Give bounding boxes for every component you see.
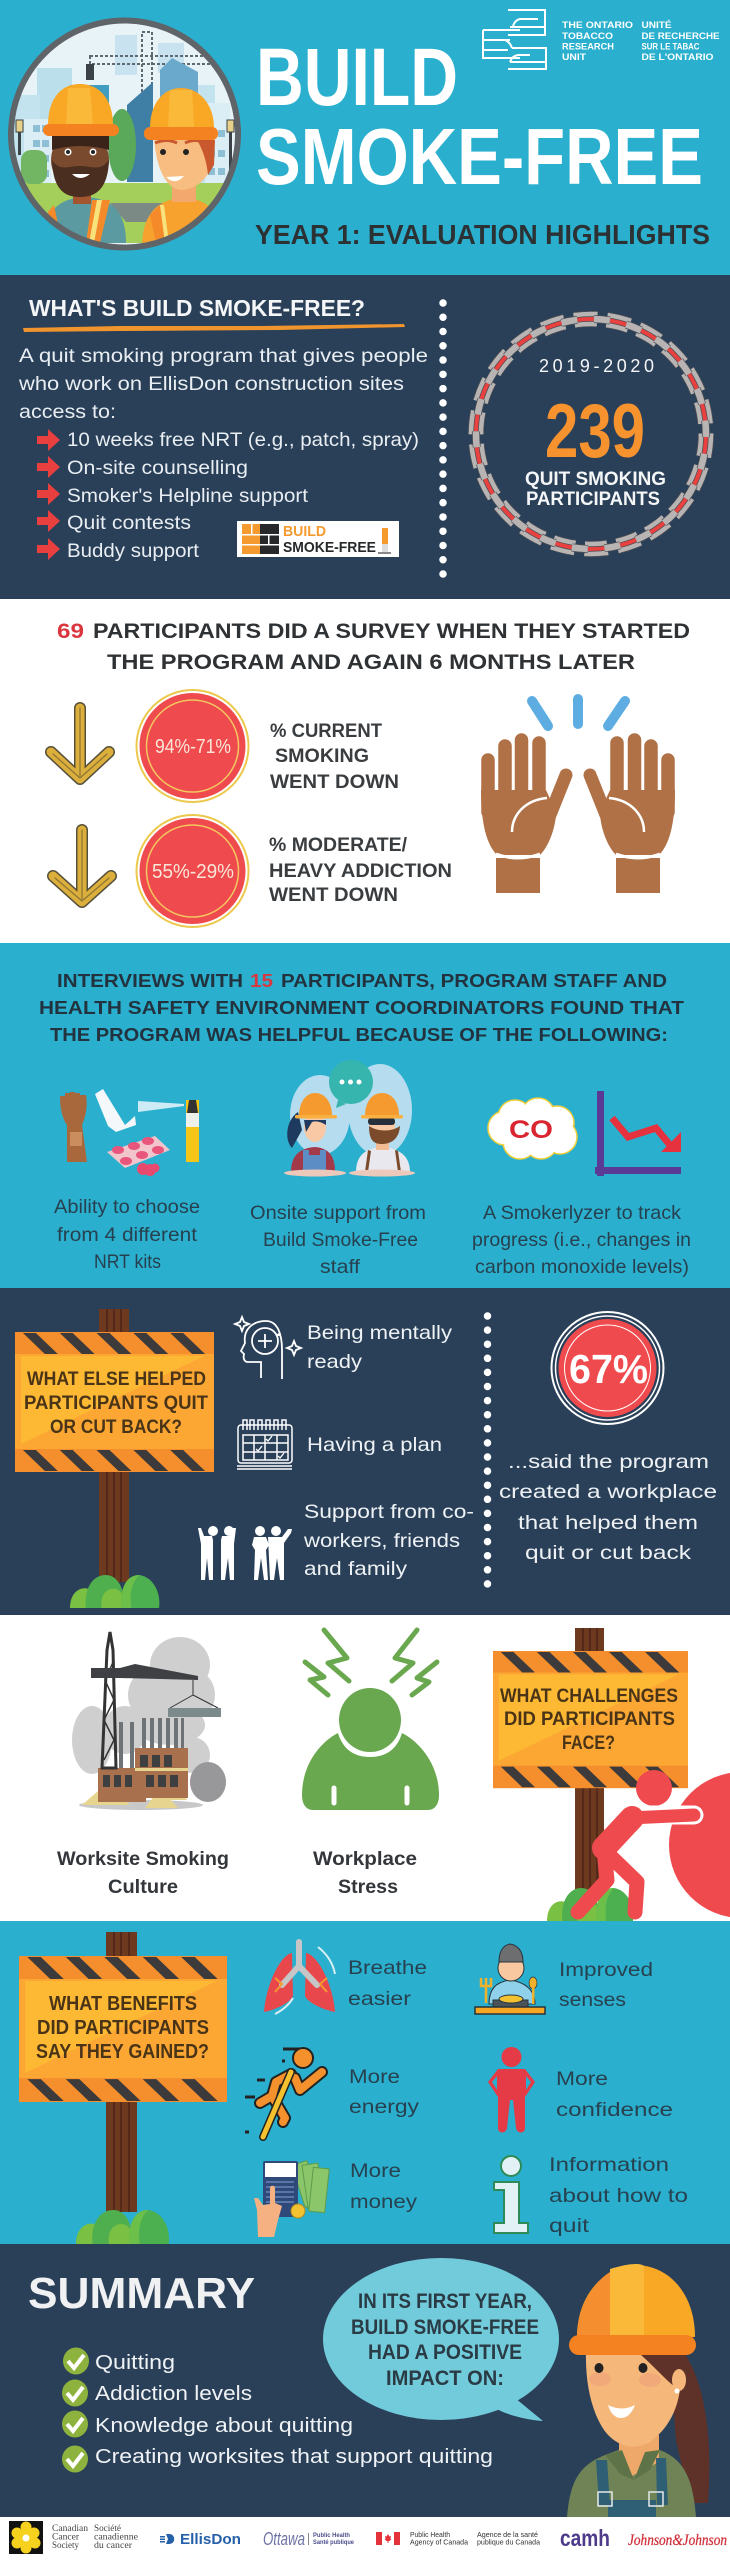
logo: Canadian Cancer Society: Canadian [52, 2524, 88, 2534]
text: improved senses: senses [559, 1989, 626, 2011]
sign: what benefits: DID PARTICIPANTS [37, 2017, 209, 2039]
logo: Ontario Tobacco Research Unit: UNITÉ [642, 20, 672, 31]
icon: CO cloud [488, 1098, 577, 1159]
text: said the program: created a workplace [499, 1481, 717, 1503]
logo: camh: camh [560, 2525, 610, 2551]
text: improved senses: Improved [559, 1959, 653, 1981]
caption: NRT kits [54, 1196, 200, 1273]
chain ring with participants count: 239 [545, 389, 645, 474]
chain ring with participants count: 2019-2020 [539, 356, 654, 376]
logo: Public Health Agency of Canada: Agency of Canada [410, 2538, 469, 2546]
text: being mentally ready: ready [307, 1351, 362, 1373]
caption: onsite support: Build Smoke-Free [263, 1229, 418, 1251]
speech bubble [323, 2258, 559, 2421]
caption: Smokerlyzer [472, 1202, 691, 1278]
dotted divider [484, 1316, 491, 1598]
label: addiction went down [269, 835, 452, 906]
illustration: female worker [567, 2264, 709, 2517]
icon: information [494, 2156, 528, 2233]
text: more money: money [350, 2191, 417, 2213]
heading: PARTICIPANTS DID A SURVEY WHEN THEY STARTED [93, 620, 690, 643]
caption: Smokerlyzer: carbon monoxide levels) [475, 1256, 689, 1278]
label: current smoking went down: WENT DOWN [270, 772, 399, 793]
text: breathe easier: Breathe [348, 1957, 427, 1979]
logo: Build Smoke-Free: SMOKE-FREE [283, 539, 376, 556]
logo: Ottawa Public Health: Santé publique [313, 2539, 354, 2546]
stat: moderate/heavy addiction [136, 815, 248, 927]
speech bubble: IN ITS FIRST YEAR, [358, 2290, 532, 2313]
panel: interviews [0, 943, 730, 1288]
bullet list: On-site counselling [67, 457, 248, 479]
heading: PARTICIPANTS, PROGRAM STAFF AND [281, 970, 667, 991]
chain ring with participants count: QUIT SMOKING [525, 469, 666, 490]
heading: SUMMARY [28, 2269, 255, 2318]
label: current smoking went down: SMOKING [275, 746, 369, 767]
text: more confidence [556, 2068, 673, 2121]
description: who work on EllisDon construction sites [18, 373, 404, 395]
bullet list [37, 429, 419, 562]
logo: Ontario Tobacco Research Unit: RESEARCH [562, 42, 614, 52]
text: said the program: that helped them [518, 1512, 698, 1534]
logo: Canadian Cancer Society: canadienne [94, 2532, 138, 2542]
icon: worksite smoking culture [72, 1632, 226, 1810]
caption: onsite support: Onsite support from [250, 1202, 426, 1224]
label: current smoking went down: % CURRENT [270, 721, 382, 742]
icon: calculator and money [254, 2161, 329, 2237]
description: access to: [19, 401, 116, 423]
text: more money: More [350, 2160, 401, 2182]
label: addiction went down: % MODERATE/ [269, 835, 408, 856]
speech bubble: HAD A POSITIVE [368, 2341, 522, 2364]
caption: Smokerlyzer: A Smokerlyzer to track [483, 1202, 681, 1224]
logo: Canadian Cancer Society: Cancer [52, 2532, 80, 2542]
text: having a plan: Having a plan [307, 1434, 442, 1456]
logo: Ontario Tobacco Research Unit: SUR LE TABAC [642, 42, 700, 52]
icon: confident person [488, 2047, 535, 2132]
logo: Ontario Tobacco Research Unit: DE RECHERCHE [642, 31, 720, 42]
label: workplace stress [313, 1848, 417, 1898]
icon: stressed person [302, 1630, 439, 1810]
stat: 67% [552, 1312, 664, 1424]
label: workplace stress: Workplace [313, 1848, 417, 1870]
logo: Build Smoke-Free [237, 521, 399, 557]
text: support from co-workers: Support from co- [304, 1501, 474, 1523]
sign: what challenges: FACE? [562, 1732, 615, 1754]
bullet list: Buddy support [67, 540, 200, 562]
stat: 67%: 67% [569, 1346, 648, 1392]
text: information about how to quit: about how to [549, 2185, 688, 2207]
caption: NRT kits: NRT kits [94, 1251, 161, 1273]
heading [57, 620, 690, 674]
title [256, 32, 703, 201]
logo: Ontario Tobacco Research Unit: UNIT [562, 52, 586, 63]
text: information about how to quit: quit [549, 2215, 590, 2237]
panel: survey results [0, 599, 730, 943]
text: more energy [349, 2066, 419, 2118]
checklist: Quitting [95, 2351, 175, 2374]
label: current smoking went down [270, 721, 399, 793]
sign: what benefits [19, 1932, 227, 2244]
heading: 69 [57, 620, 84, 643]
panel: summary [0, 2244, 730, 2517]
caption: Smokerlyzer: progress (i.e., changes in [472, 1229, 691, 1251]
title: BUILD [256, 32, 458, 123]
sign: what challenges: DID PARTICIPANTS [504, 1708, 675, 1730]
stat: moderate/heavy addiction: 55%-29% [152, 861, 234, 883]
logo: Ottawa Public Health: Ottawa [263, 2529, 305, 2549]
text: support from co-workers: workers, friends [303, 1530, 460, 1552]
man [356, 1147, 410, 1172]
icon: person pushing boulder [578, 1770, 730, 1918]
caption: NRT kits: Ability to choose [54, 1196, 200, 1218]
heading: INTERVIEWS WITH [57, 970, 243, 991]
text: more energy: More [349, 2066, 400, 2088]
sign: what benefits: WHAT BENEFITS [49, 1993, 197, 2015]
caption: NRT kits: from 4 different [57, 1224, 198, 1246]
panel: challenges [0, 1615, 730, 1921]
bullet list: Quit contests [67, 512, 191, 534]
heading: THE PROGRAM WAS HELPFUL BECAUSE OF THE FOLLOWING: [50, 1024, 668, 1045]
label: addiction went down: HEAVY ADDICTION [269, 861, 452, 882]
label: worksite smoking culture [57, 1848, 229, 1898]
text: more confidence: More [556, 2068, 608, 2090]
description: A quit smoking program that gives people [19, 345, 428, 367]
caption: onsite support: staff [320, 1256, 361, 1278]
chain ring with participants count: PARTICIPANTS [526, 489, 660, 510]
panel: what's Build Smoke-Free [0, 275, 730, 599]
text: said the program: ...said the program [508, 1451, 709, 1473]
checklist [62, 2348, 493, 2472]
logo: Ottawa Public Health: Public Health [313, 2532, 350, 2539]
logo: Canadian Cancer Society: Société [94, 2524, 121, 2534]
label: addiction went down: WENT DOWN [269, 885, 398, 906]
description [18, 345, 428, 423]
logo: Canadian Cancer Society: Society [52, 2541, 79, 2551]
subtitle: YEAR 1: EVALUATION HIGHLIGHTS [255, 219, 710, 250]
chain ring with participants count [471, 314, 711, 554]
logo: Ontario Tobacco Research Unit: THE ONTARIO [562, 20, 633, 31]
panel: header [0, 0, 730, 275]
text: said the program [499, 1451, 717, 1564]
logo: Ottawa Public Health [263, 2529, 354, 2549]
icon: down arrow [53, 830, 111, 902]
speech bubble: BUILD SMOKE-FREE [351, 2316, 539, 2339]
woman [287, 1112, 302, 1148]
brush underline [23, 324, 405, 332]
bullet list: Smoker's Helpline support [67, 485, 309, 507]
label: worksite smoking culture: Culture [108, 1876, 178, 1898]
stat: current smoking [136, 690, 248, 802]
heading: WHAT'S BUILD SMOKE-FREE? [29, 295, 365, 321]
sign: what else helped: PARTICIPANTS QUIT [24, 1392, 208, 1414]
sign: what challenges [493, 1628, 688, 1921]
icon: head with plus [235, 1317, 301, 1379]
label: worksite smoking culture: Worksite Smoking [57, 1848, 229, 1870]
text: information about how to quit: Information [549, 2154, 669, 2176]
logo: Canadian Cancer Society [9, 2521, 138, 2554]
sign: what challenges: WHAT CHALLENGES [500, 1685, 678, 1707]
text: breathe easier [348, 1957, 427, 2010]
text: support from co-workers: and family [304, 1558, 407, 1580]
checklist: Creating worksites that support quitting [95, 2445, 493, 2468]
text: support from co-workers [303, 1501, 474, 1580]
icon: runner [245, 2048, 322, 2137]
logo: Public Health Agency of Canada: Agence de la santé [477, 2530, 538, 2539]
checklist: Addiction levels [95, 2382, 252, 2405]
logo: Public Health Agency of Canada: Public Health [410, 2530, 450, 2539]
dotted divider [439, 303, 447, 574]
text: breathe easier: easier [348, 1988, 412, 2010]
icon: man tasting food [475, 1944, 545, 2014]
stat: current smoking: 94%-71% [155, 736, 231, 758]
text: information about how to quit [549, 2154, 688, 2237]
logo: Ontario Tobacco Research Unit [483, 10, 720, 69]
bullet list: 10 weeks free NRT (e.g., patch, spray) [67, 429, 419, 451]
logo: Canadian Cancer Society: du cancer [94, 2541, 133, 2551]
text: more confidence: confidence [556, 2099, 673, 2121]
logo: Ontario Tobacco Research Unit: TOBACCO [562, 31, 613, 42]
heading: 15 [250, 970, 273, 991]
text: being mentally ready: Being mentally [307, 1322, 452, 1344]
text: more money [350, 2160, 417, 2213]
panel: what else helped [0, 1288, 730, 1615]
chart: carbon monoxide falling [595, 1091, 681, 1176]
text: improved senses [559, 1959, 653, 2011]
icon: down arrow [51, 708, 109, 779]
icon: lungs [264, 1942, 335, 2014]
icon: onsite support workers [284, 1060, 415, 1176]
text: being mentally ready [307, 1322, 452, 1373]
sign: what benefits: SAY THEY GAINED? [36, 2041, 209, 2063]
icon: raised hands [481, 699, 675, 893]
left worker [54, 198, 126, 243]
icon: calendar [237, 1420, 292, 1469]
sign: what else helped [15, 1309, 214, 1608]
label: workplace stress: Stress [338, 1876, 398, 1898]
right worker [142, 199, 208, 243]
panel: partner logos [0, 2517, 730, 2560]
illustration: two construction workers in circle [0, 20, 250, 248]
icon: group of friends [198, 1526, 292, 1580]
checklist: Knowledge about quitting [95, 2414, 353, 2437]
text: said the program: quit or cut back [525, 1542, 691, 1564]
sign: what else helped: OR CUT BACK? [50, 1416, 182, 1438]
caption: onsite support [250, 1202, 426, 1278]
text: more energy: energy [349, 2096, 419, 2118]
icon: CO cloud: CO [509, 1116, 553, 1144]
heading: THE PROGRAM AND AGAIN 6 MONTHS LATER [107, 651, 635, 674]
sign: what else helped: WHAT ELSE HELPED [27, 1368, 206, 1390]
logo: EllisDon: EllisDon [180, 2531, 241, 2548]
heading: HEALTH SAFETY ENVIRONMENT COORDINATORS FOUND THAT [39, 997, 685, 1018]
logo: Build Smoke-Free: BUILD [283, 523, 326, 540]
logo: Ontario Tobacco Research Unit: DE L'ONTARIO [642, 52, 714, 63]
panel: benefits [0, 1921, 730, 2244]
logo: Public Health Agency of Canada: publique du Canada [477, 2538, 541, 2546]
speech bubble: IMPACT ON: [386, 2367, 504, 2390]
icon: NRT kits [60, 1089, 199, 1176]
heading [39, 970, 685, 1045]
logo: Public Health Agency of Canada [376, 2530, 541, 2546]
